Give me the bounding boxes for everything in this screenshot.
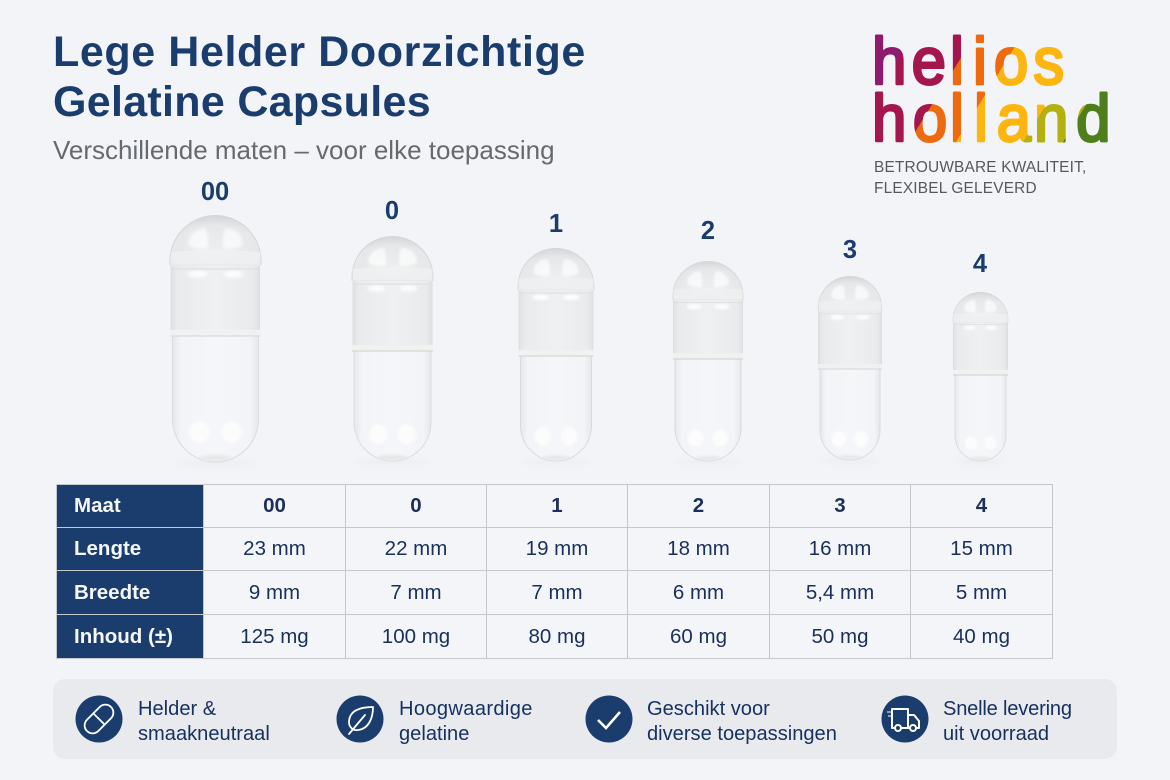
size specification table: 5 mm bbox=[956, 580, 1007, 604]
benefit text: gelatine bbox=[399, 698, 533, 745]
benefit text: gelatine: Hoogwaardige bbox=[399, 698, 533, 720]
size specification table: 60 mg bbox=[670, 624, 727, 648]
capsule 4 bbox=[953, 250, 1008, 461]
benefits strip bbox=[53, 679, 1117, 759]
benefit text: toepassingen: Geschikt voor bbox=[647, 698, 770, 720]
size specification table: 15 mm bbox=[950, 537, 1013, 560]
capsule 2: 2 bbox=[701, 217, 715, 245]
size specification table: Maat bbox=[74, 494, 121, 517]
icon: delivery truck bbox=[882, 696, 928, 742]
capsule 00 bbox=[170, 178, 261, 462]
title bbox=[53, 28, 586, 126]
size specification table: Lengte bbox=[74, 537, 141, 560]
benefit text: helder bbox=[138, 698, 270, 745]
size specification table: 40 mg bbox=[953, 624, 1010, 648]
capsule 00: 00 bbox=[201, 178, 229, 206]
benefit text: helder: smaakneutraal bbox=[138, 723, 270, 745]
size specification table: 7 mm bbox=[531, 580, 583, 604]
capsule 3 bbox=[818, 236, 882, 460]
logo: helios holland: helios bbox=[872, 25, 1064, 98]
icon: check bbox=[586, 696, 632, 742]
capsule shadows bbox=[173, 458, 1005, 466]
size specification table: Inhoud (±) bbox=[74, 624, 173, 648]
capsule 1: 1 bbox=[549, 210, 563, 238]
size specification table: 23 mm bbox=[243, 537, 306, 560]
benefit text: gelatine: gelatine bbox=[399, 723, 469, 745]
size specification table: 19 mm bbox=[526, 537, 588, 560]
size specification table bbox=[56, 484, 1053, 659]
size specification table: 80 mg bbox=[528, 624, 585, 648]
logo: helios holland: holland bbox=[872, 81, 1110, 155]
capsule 4: 4 bbox=[973, 250, 988, 278]
size specification table: 7 mm bbox=[390, 580, 442, 604]
title: Gelatine Capsules bbox=[53, 78, 431, 126]
size specification table: 18 mm bbox=[667, 537, 730, 560]
logo tagline: BETROUWBARE KWALITEIT, bbox=[874, 159, 1086, 176]
size specification table: 0 bbox=[410, 494, 422, 517]
logo: helios holland bbox=[872, 25, 1110, 155]
capsule 1 bbox=[518, 210, 594, 461]
benefit text: levering: uit voorraad bbox=[943, 723, 1049, 745]
size specification table: 4 bbox=[976, 494, 987, 517]
icon: capsule bbox=[76, 696, 122, 742]
capsules illustration bbox=[170, 178, 1008, 462]
size specification table: Breedte bbox=[74, 580, 150, 604]
size specification table: 6 mm bbox=[673, 580, 724, 604]
capsule 0: 0 bbox=[385, 197, 399, 225]
logo tagline bbox=[874, 159, 1086, 197]
size specification table: 00 bbox=[263, 494, 286, 517]
icon: leaf bbox=[336, 696, 384, 742]
size specification table: 22 mm bbox=[385, 537, 447, 560]
capsule 0 bbox=[352, 197, 433, 461]
size specification table: 1 bbox=[551, 494, 563, 517]
size specification table: 5,4 mm bbox=[806, 580, 874, 604]
benefit text: toepassingen bbox=[647, 698, 837, 745]
benefit text: levering bbox=[943, 698, 1072, 745]
capsule 2 bbox=[673, 217, 743, 461]
capsule 3: 3 bbox=[843, 236, 857, 264]
logo tagline: FLEXIBEL GELEVERD bbox=[874, 180, 1037, 197]
benefit text: levering: Snelle levering bbox=[943, 698, 1072, 720]
benefit text: helder: Helder & bbox=[138, 698, 216, 720]
size specification table: 16 mm bbox=[809, 537, 871, 560]
size specification table: 125 mg bbox=[240, 624, 309, 648]
size specification table: 100 mg bbox=[382, 624, 450, 648]
size specification table: 2 bbox=[693, 494, 704, 517]
size specification table: 50 mg bbox=[812, 624, 868, 648]
size specification table: 3 bbox=[834, 494, 846, 517]
title: Lege Helder Doorzichtige bbox=[53, 28, 586, 76]
benefit text: toepassingen: diverse toepassingen bbox=[647, 723, 837, 745]
subtitle: Verschillende maten – voor elke toepassing bbox=[53, 135, 555, 165]
size specification table: 9 mm bbox=[249, 580, 300, 604]
